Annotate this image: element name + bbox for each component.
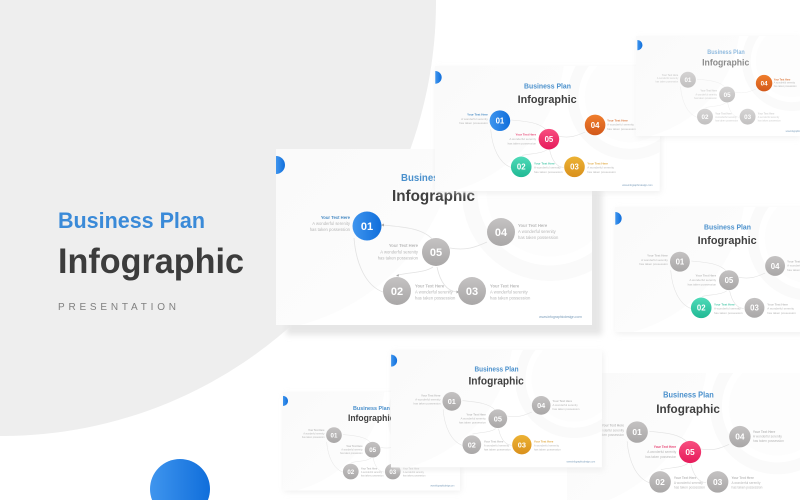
slide: right, 02 highlighted: 01 (676, 258, 685, 267)
slide: top right, 04 highlighted: 01 (684, 77, 692, 84)
slide: bottom left, all grey: Infographic (348, 413, 394, 423)
slide: bottom left, all grey: has taken possession (302, 436, 325, 439)
slide: right, 02 highlighted: Your Text Here (647, 254, 668, 258)
slide: bottom centre, 03 highlighted: A wonderful serenity (553, 403, 578, 407)
slide: right, 02 highlighted: A wonderful serenity (767, 307, 795, 311)
slide: main, 01 highlighted: A wonderful serenity (490, 290, 529, 294)
slide: main, 01 highlighted: A wonderful serenity (518, 229, 557, 234)
slide: top right, 04 highlighted: A wonderful serenity (774, 82, 796, 85)
slide: bottom left, all grey: Business Plan (353, 406, 390, 412)
slide: bottom right, 05 highlighted: A wonderful serenity (674, 481, 703, 485)
slide: bottom right, 05 highlighted: 04 (735, 432, 745, 442)
slide: bottom left, all grey: A wonderful serenity (403, 471, 425, 474)
slide: bottom left, all grey: Your Text Here (419, 434, 436, 437)
slide: main, 01 highlighted: Your Text Here (389, 243, 419, 248)
slide: top centre, all coloured: Business Plan (524, 82, 571, 91)
slide: top right, 04 highlighted: Your Text Here (662, 74, 679, 77)
slide: bottom centre, 03 highlighted: A wonderful serenity (484, 443, 510, 447)
slide: top right, 04 highlighted: A wonderful serenity (696, 93, 718, 96)
slide: bottom centre, 03 highlighted: Your Text Here (466, 412, 486, 416)
slide: bottom left, all grey: 05 (369, 447, 377, 454)
cover title (58, 208, 244, 313)
slide: right, 02 highlighted: has taken possession (714, 311, 743, 315)
slide: bottom centre, 03 highlighted: Your Text Here (553, 399, 572, 403)
slide: bottom centre, 03 highlighted: has taken possession (459, 421, 486, 425)
slide: right, 02 highlighted: Infographic (698, 235, 757, 247)
slide: bottom left, all grey: 04 (406, 436, 413, 443)
slide: top centre, all coloured: A wonderful serenity (534, 166, 561, 170)
cover title: Infographic (58, 242, 244, 281)
slide: top centre, all coloured: A wonderful serenity (509, 137, 537, 141)
slide: bottom centre, 03 highlighted: has taken possession (414, 402, 441, 406)
slide: top centre, all coloured: 05 (545, 135, 554, 144)
slide: main, 01 highlighted: www.infographicdesign.com (539, 314, 583, 319)
slide: bottom right, 05 highlighted: Your Text Here (731, 476, 754, 480)
slide: bottom right, 05 highlighted: Your Text Here (674, 476, 697, 480)
slide: main, 01 highlighted: Your Text Here (321, 215, 351, 220)
slide: main, 01 highlighted: has taken possession (415, 296, 456, 300)
slide: bottom centre, 03 highlighted: www.infographicdesign.com (567, 460, 596, 464)
slide: right, 02 highlighted: 04 (771, 262, 780, 271)
slide: bottom left, all grey: Your Text Here (361, 468, 378, 471)
slide: right, 02 highlighted: has taken possession (767, 311, 796, 315)
slide: right, 02 highlighted (443, 34, 800, 337)
slide: bottom centre, 03 highlighted: A wonderful serenity (534, 443, 560, 447)
slide: bottom centre, 03 highlighted: A wonderful serenity (461, 417, 486, 421)
slide: top centre, all coloured: 04 (591, 121, 600, 130)
slide: bottom centre, 03 highlighted: Your Text Here (534, 439, 554, 443)
slide: bottom left, all grey: A wonderful serenity (341, 449, 363, 452)
slide: bottom right, 05 highlighted: 01 (632, 427, 642, 437)
slide: top centre, all coloured: Your Text Here (534, 161, 555, 165)
slide: bottom right, 05 highlighted: 02 (655, 477, 665, 487)
slide: top centre, all coloured: 03 (570, 163, 579, 172)
slide: bottom centre, 03 highlighted: Business Plan (474, 366, 519, 373)
slide: right, 02 highlighted: A wonderful serenity (641, 258, 668, 262)
slide: top centre, all coloured: Your Text Here (607, 118, 628, 122)
slide: bottom right, 05 highlighted (381, 187, 800, 500)
slide: bottom right, 05 highlighted: has taken possession (593, 433, 624, 437)
slide: bottom right, 05 highlighted: 05 (685, 447, 695, 457)
slide: top centre, all coloured (263, 0, 692, 196)
slide: right, 02 highlighted: Business Plan (704, 223, 751, 232)
slide: main, 01 highlighted: has taken possession (518, 235, 559, 240)
slide: bottom left, all grey: A wonderful serenity (303, 433, 325, 436)
slide: bottom right, 05 highlighted: Infographic (656, 402, 720, 416)
slide: bottom centre, 03 highlighted: 04 (537, 401, 546, 410)
cover title: Business Plan (58, 208, 205, 233)
slide: right, 02 highlighted: has taken possession (688, 282, 716, 286)
slide: bottom right, 05 highlighted: A wonderful serenity (595, 428, 624, 432)
slide: bottom left, all grey: A wonderful serenity (419, 437, 440, 440)
slide: bottom left, all grey: has taken possession (419, 440, 442, 443)
slide: main, 01 highlighted: Infographic (392, 188, 475, 205)
slide: top right, 04 highlighted: A wonderful serenity (758, 116, 780, 119)
slide: bottom centre, 03 highlighted: has taken possession (534, 447, 561, 451)
slide: main, 01 highlighted: Your Text Here (518, 223, 548, 228)
slide: main, 01 highlighted: A wonderful serenity (312, 221, 351, 226)
slide: bottom centre, 03 highlighted: has taken possession (484, 447, 511, 451)
slide: top right, 04 highlighted: 02 (702, 114, 709, 121)
slide: bottom centre, 03 highlighted: 03 (518, 440, 526, 449)
slide: right, 02 highlighted: Your Text Here (714, 302, 735, 306)
slide: main, 01 highlighted: 04 (495, 227, 508, 239)
slide: right, 02 highlighted: 05 (725, 276, 734, 285)
slide: bottom left, all grey: Your Text Here (346, 445, 363, 448)
slide: bottom left, all grey: Your Text Here (308, 429, 325, 432)
slide: main, 01 highlighted: 01 (361, 221, 373, 233)
slide: top centre, all coloured: Your Text Here (467, 113, 488, 117)
slide: main, 01 highlighted: 05 (430, 247, 442, 259)
slide: top right, 04 highlighted: 04 (761, 80, 768, 87)
slide: bottom left, all grey: www.infographicdesign.com (430, 486, 455, 488)
slide: right, 02 highlighted: has taken possession (639, 262, 668, 266)
slide: bottom left, all grey: has taken possession (361, 474, 384, 477)
slide: top right, 04 highlighted: has taken possession (694, 97, 718, 100)
slide: bottom right, 05 highlighted: Your Text Here (654, 445, 676, 449)
slide: top centre, all coloured: A wonderful serenity (587, 166, 615, 170)
slide: bottom right, 05 highlighted: has taken possession (731, 485, 763, 489)
slide: top centre, all coloured: 01 (496, 117, 505, 126)
slide: main, 01 highlighted: has taken possession (310, 227, 351, 232)
slide: top centre, all coloured: has taken possession (508, 141, 536, 145)
slide: main, 01 highlighted: has taken possession (490, 296, 531, 300)
slide: top right, 04 highlighted: 03 (744, 114, 752, 121)
slide: bottom left, all grey (147, 256, 486, 495)
slide: bottom right, 05 highlighted: Business Plan (663, 391, 714, 400)
slide: main, 01 highlighted (33, 0, 638, 335)
slide: top right, 04 highlighted: Business Plan (707, 50, 745, 56)
slide: main, 01 highlighted: Your Text Here (415, 284, 445, 288)
slide: top centre, all coloured: has taken possession (587, 170, 616, 174)
slide: bottom left, all grey: Your Text Here (403, 468, 420, 471)
slide: bottom right, 05 highlighted: 03 (713, 477, 723, 487)
slide: bottom right, 05 highlighted: A wonderful serenity (731, 481, 761, 485)
slide: bottom centre, 03 highlighted: Your Text Here (421, 394, 441, 398)
slide: bottom right, 05 highlighted: A wonderful serenity (753, 434, 782, 438)
slide: bottom left, all grey: A wonderful serenity (361, 471, 383, 474)
slide: top right, 04 highlighted: Your Text Here (700, 90, 718, 93)
slide: top centre, all coloured: has taken possession (534, 170, 563, 174)
slide: right, 02 highlighted: Your Text Here (695, 274, 716, 278)
slide: top right, 04 highlighted: has taken possession (774, 85, 797, 88)
cover title: PRESENTATION (58, 302, 176, 313)
slide: top right, 04 highlighted: Your Text Here (774, 78, 791, 81)
slide: bottom left, all grey: 02 (347, 469, 355, 476)
slide: top right, 04 highlighted: 05 (724, 92, 731, 99)
slide: top right, 04 highlighted: has taken possession (758, 120, 781, 123)
slide: top right, 04 highlighted: Your Text Here (758, 113, 775, 116)
slide: main, 01 highlighted: Your Text Here (490, 284, 520, 288)
slide: bottom centre, 03 highlighted: A wonderful serenity (415, 398, 441, 402)
slide: top centre, all coloured: 02 (517, 163, 526, 172)
slide: top right, 04 highlighted: Infographic (702, 58, 749, 68)
slide: main, 01 highlighted: Business Plan (401, 172, 467, 184)
slide: main, 01 highlighted: 03 (466, 286, 478, 298)
slide: right, 02 highlighted: 03 (750, 304, 759, 313)
background grey circle (0, 0, 436, 436)
slide: top centre, all coloured: has taken possession (459, 121, 488, 125)
slide: top centre, all coloured: has taken possession (607, 127, 636, 131)
slide: bottom centre, 03 highlighted: Infographic (468, 376, 524, 388)
slide: top right, 04 highlighted: Your Text Here (715, 113, 732, 116)
blue circle (150, 459, 210, 500)
slide: top centre, all coloured: A wonderful serenity (461, 117, 488, 121)
slide: top right, 04 highlighted: has taken possession (715, 120, 739, 123)
slide: main, 01 highlighted: A wonderful serenity (380, 250, 419, 254)
slide: right, 02 highlighted: A wonderful serenity (689, 278, 717, 282)
slide: top centre, all coloured: Your Text Here (515, 133, 536, 137)
slide: bottom left, all grey: 03 (389, 469, 397, 476)
slide: bottom centre, 03 highlighted: has taken possession (553, 407, 580, 411)
slide: top centre, all coloured: Your Text Here (587, 161, 608, 165)
slide: right, 02 highlighted: A wonderful serenity (714, 307, 741, 311)
slide: bottom centre, 03 highlighted (229, 188, 633, 472)
slide: bottom centre, 03 highlighted: Your Text Here (484, 439, 504, 443)
slide: bottom left, all grey: has taken possession (403, 474, 426, 477)
slide: bottom centre, 03 highlighted: 05 (494, 414, 502, 423)
slide: bottom right, 05 highlighted: has taken possession (645, 455, 676, 459)
slide: right, 02 highlighted: Your Text Here (767, 302, 788, 306)
slide: top centre, all coloured: Infographic (518, 94, 577, 106)
slide: bottom right, 05 highlighted: Your Text Here (753, 430, 776, 434)
slide: top centre, all coloured: www.infographicdesign.com (622, 183, 653, 187)
slide: main, 01 highlighted: has taken possession (378, 256, 419, 260)
slide: top right, 04 highlighted: A wonderful serenity (715, 116, 737, 119)
slide: top right, 04 highlighted: has taken possession (655, 81, 679, 84)
slide: bottom right, 05 highlighted: has taken possession (674, 485, 705, 489)
slide: top centre, all coloured: A wonderful serenity (607, 123, 634, 127)
slide: right, 02 highlighted: 02 (697, 304, 706, 313)
slide: bottom left, all grey: 01 (331, 432, 338, 439)
slide: top right, 04 highlighted: A wonderful serenity (657, 77, 679, 80)
slide: bottom right, 05 highlighted: Your Text Here (602, 424, 624, 428)
slide: bottom centre, 03 highlighted: 02 (468, 440, 476, 449)
slide: main, 01 highlighted: A wonderful serenity (415, 290, 454, 294)
slide: bottom left, all grey: has taken possession (340, 452, 363, 455)
slide: bottom right, 05 highlighted: has taken possession (753, 439, 784, 443)
slide: main, 01 highlighted: 02 (391, 286, 403, 298)
slide: bottom centre, 03 highlighted: 01 (448, 397, 456, 406)
slide: bottom right, 05 highlighted: A wonderful serenity (647, 450, 677, 454)
slide: top right, 04 highlighted (498, 0, 800, 140)
